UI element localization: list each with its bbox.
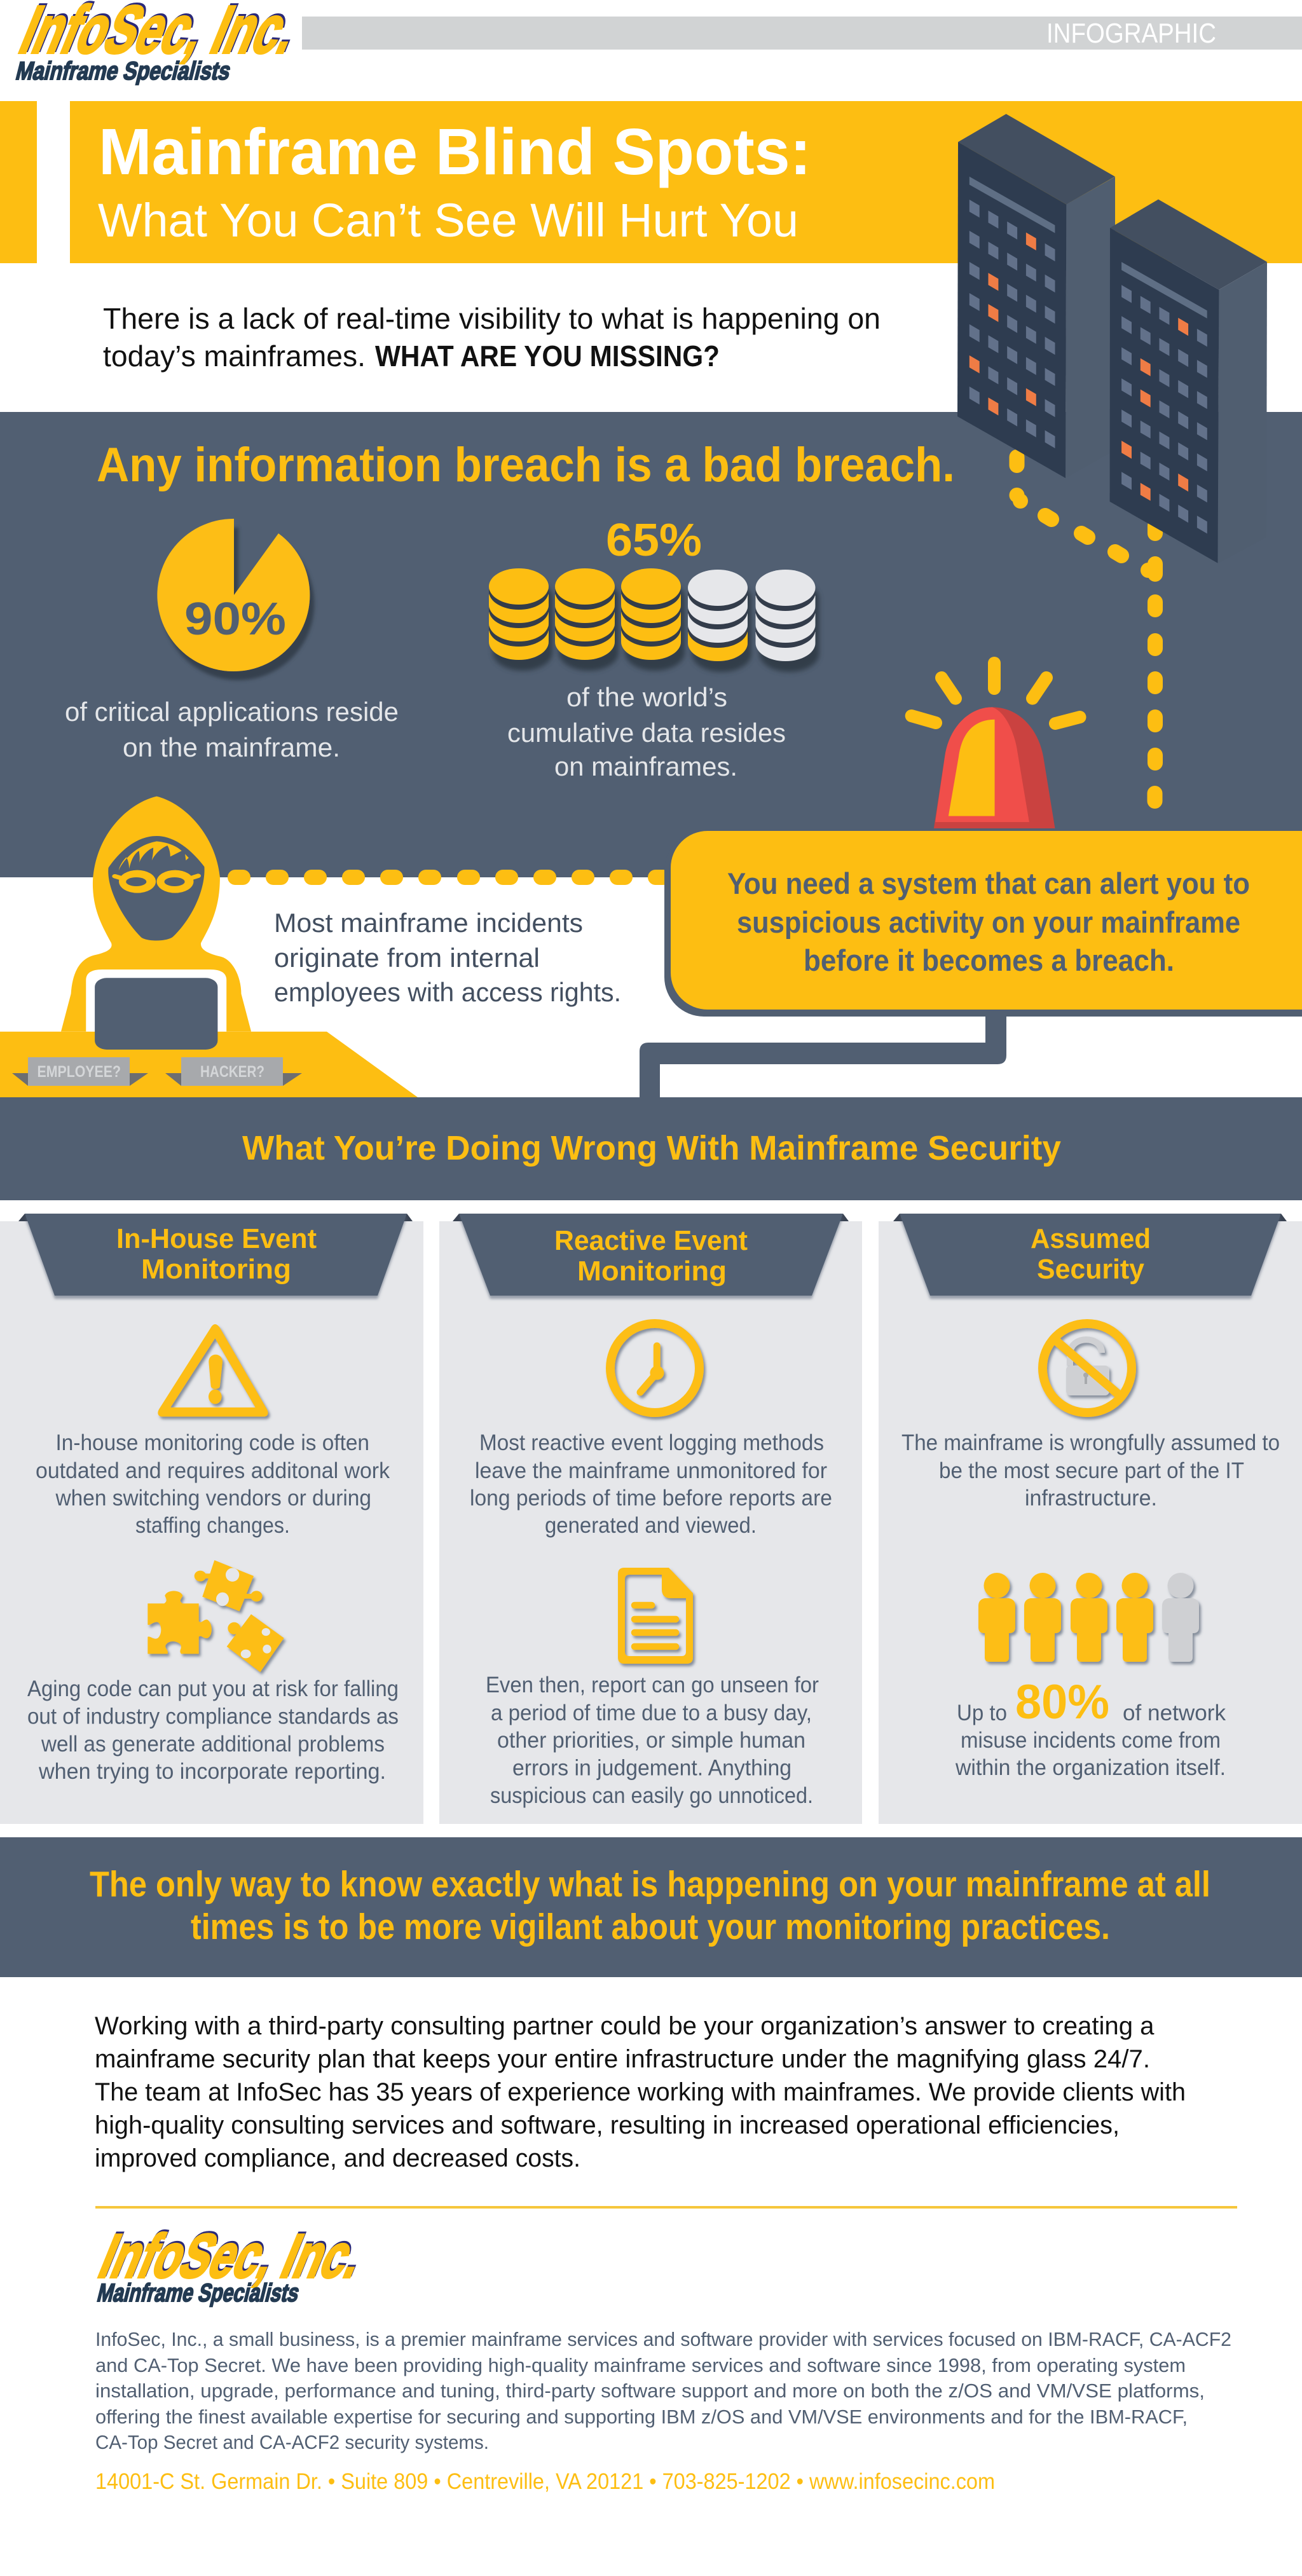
- title banner: What You Can’t See Will Hurt You: [98, 194, 798, 247]
- text: company description: installation, upgrade, performance and tuning, third-party software support and more on both the z/OS and VM/VSE platforms,: [95, 2380, 1205, 2402]
- text: internal incidents: [274, 908, 621, 1007]
- stack 2: [555, 568, 615, 660]
- text: even then: a period of time due to a busy day,: [491, 1701, 812, 1725]
- caption: 90%: of critical applications reside: [65, 697, 399, 727]
- callout: alert system: suspicious activity on your mainframe: [737, 905, 1240, 939]
- ribbon: assumed: [893, 1214, 1287, 1296]
- callout: alert system: You need a system that can alert you to: [727, 867, 1250, 900]
- stack 5: [755, 570, 815, 661]
- icon: puzzle pieces: [147, 1560, 284, 1672]
- panel: assumed security: [879, 1214, 1302, 1824]
- text: consulting partner paragraph: [95, 2012, 1186, 2172]
- text: company description: and CA-Top Secret. We have been providing high-quality mainframe services and software since 1998, from operating system: [95, 2354, 1186, 2376]
- text: internal incidents: employees with access rights.: [274, 977, 621, 1007]
- ribbon: in-house: In-House Event: [116, 1223, 317, 1254]
- text: in-house description: staffing changes.: [135, 1513, 290, 1538]
- text: reactive description: Most reactive event logging methods: [479, 1430, 824, 1455]
- caption: 90%: on the mainframe.: [123, 732, 340, 762]
- text: in-house description: when switching vendors or during: [55, 1486, 371, 1511]
- logo: InfoSec header: [10, 0, 312, 85]
- connector: callout to section: [640, 1011, 1006, 1097]
- text: consulting partner paragraph: improved compliance, and decreased costs.: [95, 2144, 580, 2172]
- callout: alert system: [664, 831, 1302, 1017]
- logo: InfoSec footer: InfoSec, Inc.: [91, 2220, 376, 2289]
- label: employee: [12, 1057, 148, 1086]
- stat: 65%: 65%: [606, 515, 702, 566]
- header bar: [302, 17, 1302, 50]
- text: company description: InfoSec, Inc., a small business, is a premier mainframe services and software provider with services focused on IBM-RACF, CA-ACF2: [95, 2328, 1231, 2350]
- chart: people 80%: [978, 1573, 1199, 1662]
- text: consulting partner paragraph: Working with a third-party consulting partner could be your organization’s answer to creating a: [95, 2012, 1155, 2040]
- stack 3: [621, 568, 681, 660]
- dashed path: towers to alert: [1010, 449, 1163, 809]
- text: 80% stat: Up to: [957, 1701, 1007, 1725]
- band: vigilance message: [0, 1837, 1302, 1977]
- text: even then: Even then, report can go unseen for: [486, 1673, 819, 1697]
- text: in-house description: In-house monitoring code is often: [56, 1430, 369, 1455]
- text: 80% stat: misuse incidents come from: [961, 1728, 1221, 1753]
- icon: alert siren: [912, 663, 1079, 828]
- section band: doing wrong: What You’re Doing Wrong With Mainframe Security: [242, 1129, 1061, 1167]
- label: hacker: [165, 1057, 302, 1086]
- stack 1: [489, 568, 549, 660]
- text: reactive description: leave the mainframe unmonitored for: [475, 1458, 827, 1483]
- text: even then: errors in judgement. Anything: [512, 1756, 791, 1780]
- section band: doing wrong: [0, 1097, 1302, 1200]
- text: reactive description: long periods of time before reports are: [470, 1486, 832, 1511]
- panel: in-house event monitoring: [0, 1214, 423, 1824]
- text: contact line: 14001-C St. Germain Dr. • Suite 809 • Centreville, VA 20121 • 703-825-1202 • www.infosecinc.com: [95, 2469, 995, 2494]
- intro text: [103, 302, 881, 373]
- text: aging code: well as generate additional problems: [41, 1732, 385, 1757]
- text: company description: CA-Top Secret and CA-ACF2 security systems.: [95, 2431, 489, 2453]
- ribbon: reactive: [453, 1214, 849, 1296]
- intro text: WHAT ARE YOU MISSING?: [375, 339, 720, 373]
- chart: 90% pie: 90%: [184, 594, 286, 645]
- text: assumed description: [901, 1430, 1280, 1511]
- text: even then: other priorities, or simple human: [497, 1728, 805, 1753]
- text: consulting partner paragraph: The team at InfoSec has 35 years of experience working with mainframes. We provide clients with: [95, 2078, 1186, 2106]
- ribbon: assumed: Security: [1037, 1254, 1145, 1285]
- callout: alert system: before it becomes a breach.: [804, 943, 1174, 977]
- ribbon: reactive: Monitoring: [577, 1256, 727, 1287]
- logo: InfoSec footer: Mainframe Specialists: [95, 2278, 303, 2307]
- ribbon: assumed: Assumed: [1031, 1223, 1151, 1254]
- text: even then: [486, 1673, 819, 1808]
- icon: warning triangle: [158, 1324, 268, 1416]
- icon: document: [618, 1568, 693, 1664]
- logo: InfoSec footer: [90, 2220, 376, 2307]
- ribbon: in-house: [18, 1214, 413, 1296]
- text: aging code: out of industry compliance standards as: [27, 1704, 399, 1729]
- desk: [0, 1032, 418, 1097]
- text: 80% stat: [955, 1675, 1226, 1780]
- logo: InfoSec footer: InfoSec, Inc.: [90, 2222, 375, 2291]
- text: aging code: when trying to incorporate reporting.: [38, 1759, 386, 1784]
- label: employee: EMPLOYEE?: [37, 1063, 121, 1081]
- chart: 90% pie: [157, 519, 310, 671]
- heading: breach: Any information breach is a bad breach.: [97, 438, 955, 492]
- text: assumed description: The mainframe is wrongfully assumed to: [901, 1430, 1280, 1455]
- icon: clock: [610, 1324, 699, 1413]
- dotted connector: hacker to callout: [228, 870, 671, 885]
- header bar: INFOGRAPHIC: [1046, 18, 1216, 49]
- caption: 65%: cumulative data resides: [507, 718, 786, 748]
- text: internal incidents: originate from internal: [274, 943, 540, 973]
- caption: 65%: of the world’s: [566, 682, 727, 712]
- band: vigilance message: times is to be more vigilant about your monitoring practices.: [191, 1907, 1110, 1947]
- text: assumed description: be the most secure part of the IT: [939, 1458, 1244, 1483]
- title banner: [0, 101, 1302, 263]
- text: in-house description: [36, 1430, 390, 1538]
- text: assumed description: infrastructure.: [1025, 1486, 1157, 1511]
- text: in-house description: outdated and requires additonal work: [36, 1458, 390, 1483]
- ribbon: reactive: Reactive Event: [554, 1225, 748, 1256]
- dark breach section: [0, 412, 1302, 877]
- caption: 90%: [65, 697, 399, 762]
- chart: database stacks 65%: [489, 568, 815, 661]
- stack 4: [688, 570, 748, 661]
- text: internal incidents: Most mainframe incidents: [274, 908, 583, 938]
- label: hacker: HACKER?: [200, 1063, 264, 1081]
- caption: 65%: on mainframes.: [554, 751, 737, 781]
- text: even then: suspicious can easily go unnoticed.: [490, 1783, 813, 1808]
- title banner: Mainframe Blind Spots:: [99, 115, 811, 188]
- text: company description: [95, 2328, 1231, 2453]
- text: consulting partner paragraph: mainframe security plan that keeps your entire infrastructure under the magnifying glass 24/7.: [95, 2045, 1150, 2073]
- text: consulting partner paragraph: high-quality consulting services and software, resulting in increased operational efficiencies,: [95, 2111, 1120, 2139]
- ribbon: in-house: Monitoring: [141, 1254, 291, 1285]
- icon: mainframe towers: [957, 114, 1267, 563]
- text: reactive description: [470, 1430, 832, 1538]
- text: 80% stat: 80%: [1015, 1675, 1109, 1729]
- text: 80% stat: within the organization itself.: [955, 1755, 1226, 1780]
- icon: no lock: [1043, 1324, 1132, 1413]
- text: aging code: Aging code can put you at risk for falling: [27, 1676, 399, 1701]
- divider: [95, 2206, 1237, 2209]
- icon: hooded figure: [61, 797, 251, 1050]
- panel: reactive event monitoring: [439, 1214, 862, 1824]
- logo: InfoSec header: Mainframe Specialists: [13, 57, 234, 85]
- text: reactive description: generated and viewed.: [545, 1513, 757, 1538]
- caption: 65%: [507, 682, 786, 781]
- text: company description: offering the finest available expertise for securing and supporting IBM z/OS and VM/VSE environments and for the IBM-RACF,: [95, 2406, 1188, 2428]
- intro text: There is a lack of real-time visibility to what is happening on: [103, 302, 881, 335]
- text: aging code: [27, 1676, 399, 1784]
- text: 80% stat: of network: [1123, 1701, 1226, 1725]
- intro text: today’s mainframes.: [103, 339, 366, 373]
